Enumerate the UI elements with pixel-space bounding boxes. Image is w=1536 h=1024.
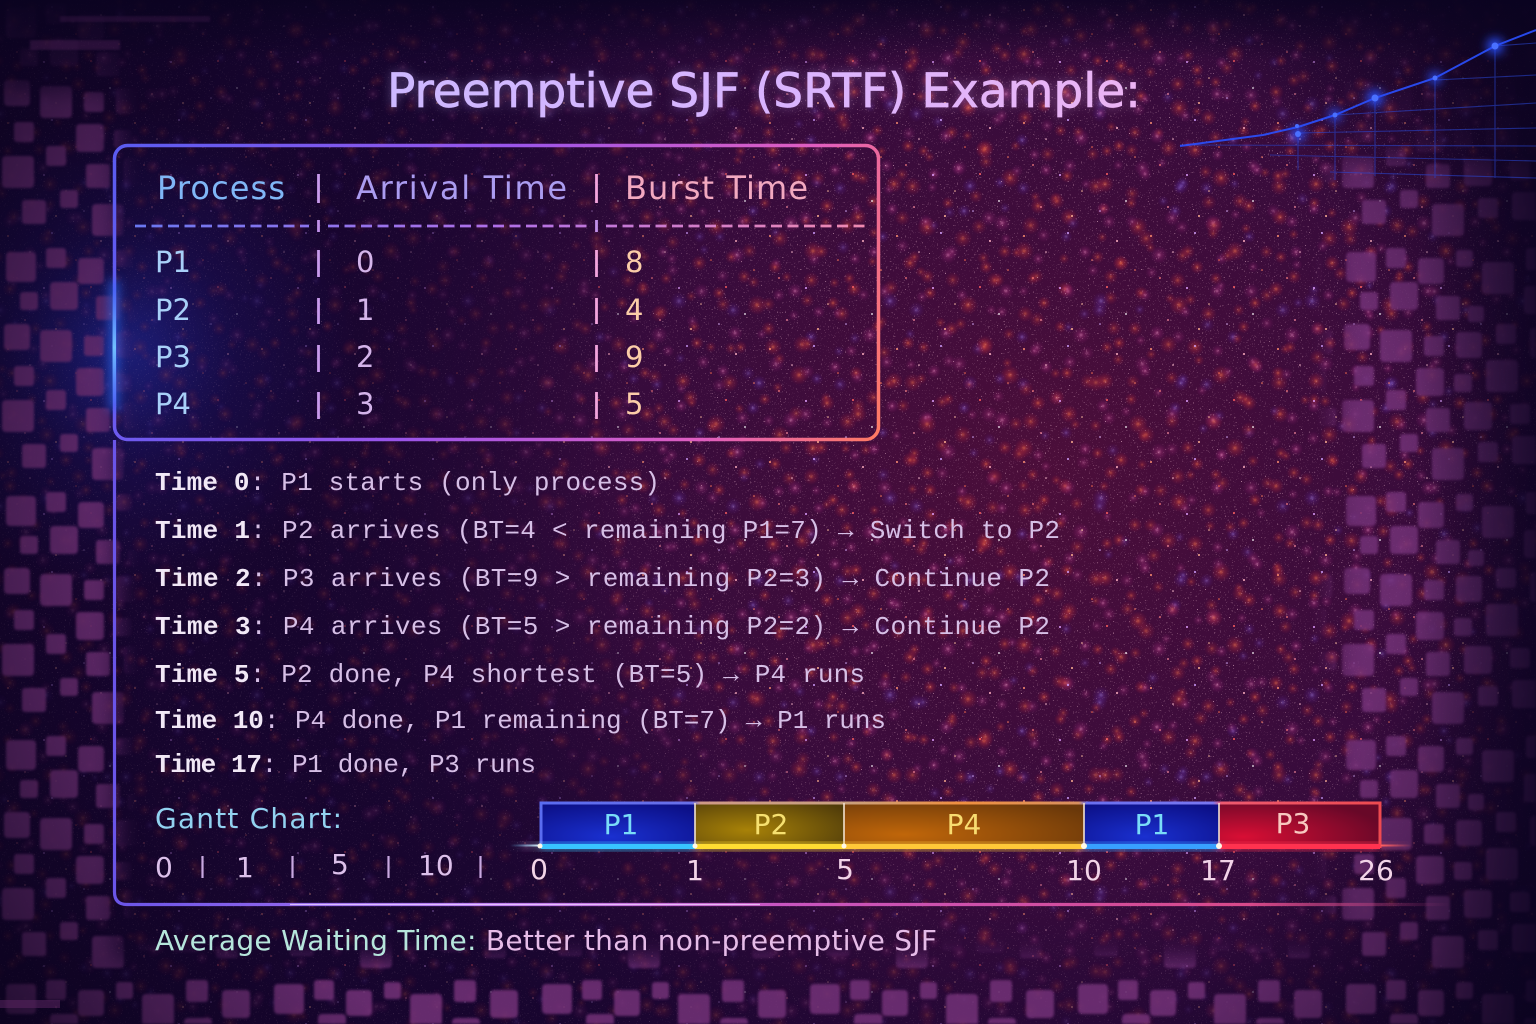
step-by-step timeline text: Time 0: P1 starts (only process) xyxy=(155,468,660,498)
column separators xyxy=(318,174,596,419)
segment P2: P2 xyxy=(754,808,788,841)
process column: P2 xyxy=(155,293,191,327)
glowing baseline xyxy=(510,844,1412,849)
left time scale row xyxy=(155,848,480,884)
gantt time labels xyxy=(530,853,1394,887)
gantt time labels: 5 xyxy=(836,853,854,886)
arrival column: 3 xyxy=(356,387,374,421)
gantt time labels: 26 xyxy=(1358,854,1394,887)
tick sparks xyxy=(538,843,1222,849)
arrival column: 0 xyxy=(356,245,374,279)
step-by-step timeline text: Time 3: P4 arrives (BT=5 > remaining P2=2) → Continue P2 xyxy=(155,612,1050,642)
segment P4: P4 xyxy=(947,808,981,841)
process column: P3 xyxy=(155,340,191,374)
gantt time labels: 17 xyxy=(1200,854,1236,887)
burst column: 4 xyxy=(625,293,643,327)
step-by-step timeline text: Time 17: P1 done, P3 runs xyxy=(155,750,536,780)
arrival column: 2 xyxy=(356,340,374,374)
panel: process table xyxy=(109,146,878,440)
left time scale row: 0 xyxy=(155,851,173,884)
burst column xyxy=(625,245,643,421)
gantt chart bars xyxy=(510,803,1412,849)
segment P1 xyxy=(541,803,695,848)
gantt time labels: 10 xyxy=(1066,854,1102,887)
segment P1 second: P1 xyxy=(1135,808,1169,841)
table header row: Arrival Time xyxy=(356,169,567,207)
burst column: 5 xyxy=(625,387,643,421)
left edge blue glow xyxy=(109,280,119,410)
left time scale row: 10 xyxy=(418,849,454,882)
step-by-step timeline text: Time 1: P2 arrives (BT=4 < remaining P1=7) → Switch to P2 xyxy=(155,516,1060,546)
segment P2 xyxy=(695,803,844,848)
left time scale row: 5 xyxy=(331,848,349,881)
segment P3: P3 xyxy=(1276,807,1310,840)
panel frame: lower section xyxy=(114,440,1450,904)
step-by-step timeline text: Time 5: P2 done, P4 shortest (BT=5) → P4 runs xyxy=(155,660,865,690)
gantt time labels: 0 xyxy=(530,853,548,886)
step-by-step timeline text: Time 2: P3 arrives (BT=9 > remaining P2=3) → Continue P2 xyxy=(155,564,1050,594)
table header row: Burst Time xyxy=(625,169,808,207)
process column xyxy=(155,245,191,421)
gantt chart heading: Gantt Chart: xyxy=(155,802,342,835)
process column: P4 xyxy=(155,387,191,421)
table header row: Process xyxy=(157,169,285,207)
step-by-step timeline text xyxy=(155,468,1060,780)
segment P3 xyxy=(1219,803,1380,848)
segment P4 xyxy=(844,803,1084,848)
title: Preemptive SJF (SRTF) Example: xyxy=(387,64,1141,119)
segment P1: P1 xyxy=(604,808,638,841)
burst column: 9 xyxy=(625,340,643,374)
process column: P1 xyxy=(155,245,191,279)
top and right border xyxy=(541,803,1380,848)
gantt time labels: 1 xyxy=(686,854,704,887)
arrival column: 1 xyxy=(356,293,374,327)
average waiting time note: Average Waiting Time: Better than non-preemptive SJF xyxy=(155,924,937,957)
left time scale row: 1 xyxy=(236,851,254,884)
segment P1 second xyxy=(1084,803,1219,848)
burst column: 8 xyxy=(625,245,643,279)
decorative rising line chart top right xyxy=(1180,30,1536,180)
step-by-step timeline text: Time 10: P4 done, P1 remaining (BT=7) → P1 runs xyxy=(155,706,886,736)
dashed header rule xyxy=(135,220,865,232)
arrival column xyxy=(356,245,374,421)
table header row xyxy=(157,169,808,207)
